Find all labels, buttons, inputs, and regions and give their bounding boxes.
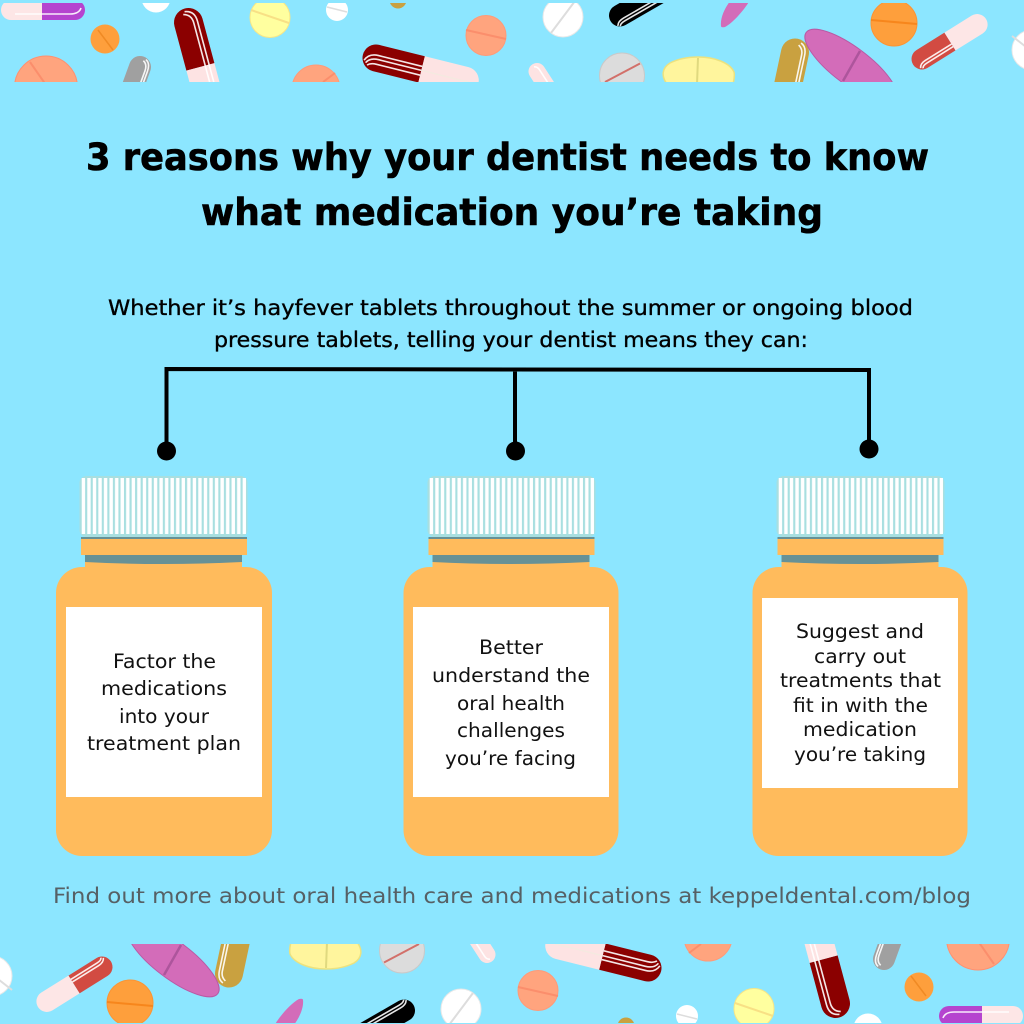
bottle body xyxy=(404,537,618,856)
bottle label xyxy=(762,598,958,788)
bottle cap xyxy=(80,476,248,537)
bottle text: you’re taking xyxy=(794,743,926,766)
bottle cap xyxy=(428,476,596,537)
bottle label xyxy=(66,607,262,797)
pill: long red capsule xyxy=(360,42,482,97)
title: 3 reasons why your dentist needs to know xyxy=(86,136,929,179)
pill: gold capsule xyxy=(771,36,812,104)
bottle text: Better xyxy=(479,636,544,659)
bottle text: understand the xyxy=(432,664,590,687)
pill: small orange tablet xyxy=(90,24,120,54)
pill: yellow tablet xyxy=(250,0,290,38)
bottle text: treatments that xyxy=(780,669,941,692)
pill: small white tablet xyxy=(326,0,348,21)
pill: large white tablet xyxy=(543,0,583,37)
bottle 3 xyxy=(752,476,968,856)
title: what medication you’re taking xyxy=(201,191,823,234)
bottle text: medication xyxy=(803,718,917,741)
bottom pill border xyxy=(0,907,1023,1024)
pill: white tablet xyxy=(142,0,170,12)
intro text: Whether it’s hayfever tablets throughout the summer or ongoing blood xyxy=(108,296,913,320)
bottle text: treatment plan xyxy=(87,732,241,755)
pill: white tablet at edge xyxy=(1012,30,1024,70)
pill: pale capsule xyxy=(525,60,567,111)
bottle text xyxy=(780,620,941,766)
pill: yellow oval tablet xyxy=(663,57,734,84)
bottle 1 xyxy=(56,476,272,856)
bottle text: you’re facing xyxy=(445,747,576,770)
bottle text: carry out xyxy=(814,645,906,668)
bottle text: oral health xyxy=(457,692,565,715)
pill: dark red capsule xyxy=(171,5,226,113)
top pill border xyxy=(1,0,1024,119)
bottle text: medications xyxy=(101,677,227,700)
pill: salmon tablet xyxy=(14,56,78,119)
footer text: Find out more about oral health care and medications at keppeldental.com/blog xyxy=(53,884,971,908)
bottle body xyxy=(56,537,272,856)
bottle text: challenges xyxy=(457,719,565,742)
title xyxy=(86,136,929,234)
pill: purple sliver xyxy=(721,0,750,27)
intro text: pressure tablets, telling your dentist means they can: xyxy=(214,328,808,352)
connector lines xyxy=(157,369,878,460)
bottle body xyxy=(752,537,968,856)
bottle text: Suggest and xyxy=(796,620,924,643)
pill: gold fragment xyxy=(390,0,406,8)
bottle label xyxy=(413,607,609,797)
bottle 2 xyxy=(404,476,618,856)
pill: large purple oval xyxy=(795,18,907,114)
bottle text xyxy=(432,636,590,770)
bottle text: Factor the xyxy=(113,650,216,673)
bottle text: into your xyxy=(119,705,210,728)
pill: grey capsule xyxy=(116,53,154,108)
pill: black capsule xyxy=(605,0,664,31)
bottle cap xyxy=(776,476,944,537)
pill: red and white capsule xyxy=(908,10,992,73)
intro text xyxy=(108,296,913,352)
pill: salmon tablet right xyxy=(466,16,506,56)
pill: purple capsule xyxy=(1,0,85,20)
bottle text xyxy=(87,650,241,755)
bottle text: fit in with the xyxy=(793,694,928,717)
pill: orange tablet xyxy=(871,0,917,46)
pill: grey tablet xyxy=(600,53,644,98)
pill: salmon tablet small arc xyxy=(292,65,340,113)
